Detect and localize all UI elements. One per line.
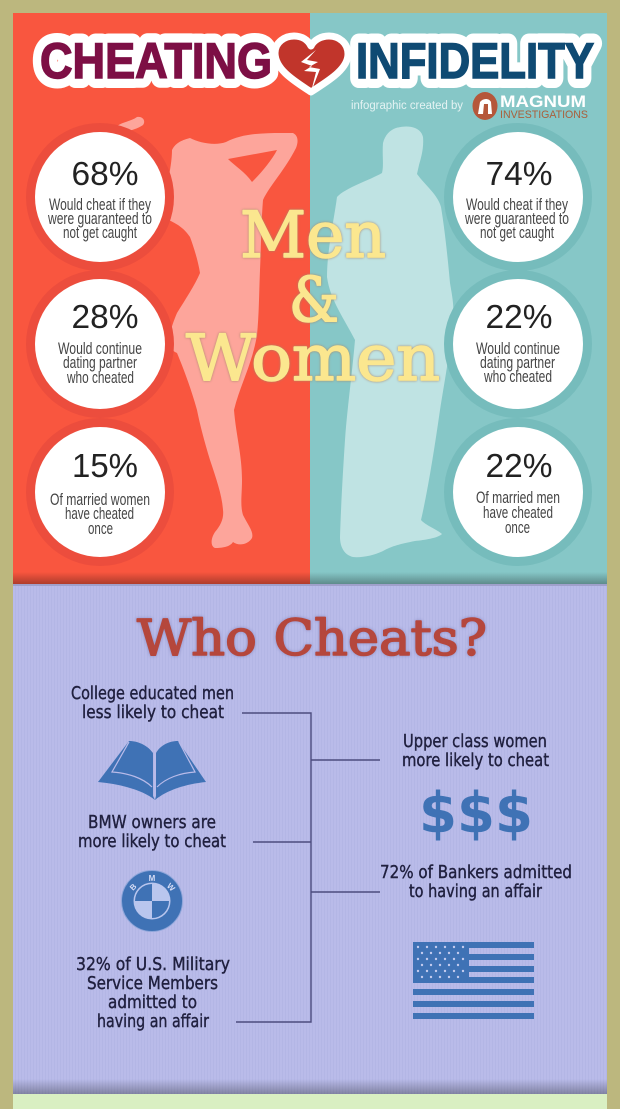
panel: women background: [13, 13, 310, 584]
stat: women continue dating: who cheated: [66, 368, 134, 387]
icon: bmw logo: M: [149, 874, 156, 883]
text: military members: [76, 954, 230, 1032]
text: military members: Service Members: [87, 973, 218, 994]
panel: who cheats: [13, 586, 607, 1094]
icon: bmw logo: W: [165, 881, 177, 893]
text: bankers: 72% of Bankers admitted: [380, 862, 572, 883]
stat: married men cheated: [444, 418, 592, 566]
icon: open book: [98, 741, 206, 800]
stat: women continue dating: 28%: [72, 298, 138, 335]
stat: women would cheat if not caught: were guaranteed to: [47, 209, 152, 228]
stat: men would cheat if not caught: were guaranteed to: [464, 209, 569, 228]
connector lines: [236, 713, 380, 1022]
text: bmw owners: [78, 812, 226, 852]
stat: women continue dating: dating partner: [63, 353, 137, 372]
panel: next section strip: [13, 1094, 607, 1109]
stat: men continue dating: who cheated: [483, 367, 552, 386]
stat: men continue dating: [444, 270, 592, 418]
title: Cheating: CHEATING: [40, 33, 272, 89]
text: bankers: [380, 862, 572, 902]
panel: men background: [310, 13, 607, 584]
stat: women would cheat if not caught: 68%: [72, 155, 138, 192]
title banner: [40, 33, 594, 92]
panel: lower shade: [13, 1079, 607, 1094]
stat: married men cheated: have cheated: [483, 503, 553, 522]
stat: men continue dating: dating partner: [480, 353, 555, 372]
text: college educated men: College educated men: [71, 683, 234, 704]
stat: men continue dating: Would continue: [476, 339, 560, 358]
stat: women would cheat if not caught: [26, 123, 174, 271]
icon: bmw logo: [122, 870, 182, 932]
text: college educated men: [71, 683, 234, 723]
text: magnum investigations: [500, 92, 588, 121]
icon: dollar signs: $$$: [419, 781, 533, 846]
text: upper class women: Upper class women: [403, 731, 547, 752]
text: upper class women: more likely to cheat: [402, 750, 549, 771]
text: military members: having an affair: [97, 1011, 209, 1032]
text: bmw owners: more likely to cheat: [78, 831, 226, 852]
icon: us flag: [413, 942, 534, 1019]
panel: who cheats top rim: [13, 584, 607, 586]
stat: men continue dating: 22%: [486, 298, 552, 335]
stat: married men cheated: once: [505, 518, 530, 537]
stat: women would cheat if not caught: Would cheat if they: [49, 195, 151, 214]
text: military members: 32% of U.S. Military: [76, 954, 230, 975]
stat: married women cheated: have cheated: [65, 504, 134, 523]
stat: married women cheated: [26, 418, 174, 566]
stat: married women cheated: once: [88, 519, 113, 538]
icon: magnum fingerprint logo: [472, 92, 498, 120]
stat: men would cheat if not caught: [444, 123, 592, 271]
title: Cheating: CHEATING: [40, 33, 272, 89]
text: infographic created by: infographic created by: [351, 100, 463, 112]
text: magnum investigations: INVESTIGATIONS: [500, 109, 588, 121]
stat: women continue dating: [26, 270, 174, 418]
heading: Men and Women: Women: [186, 322, 440, 396]
text: magnum investigations: MAGNUM: [500, 92, 586, 111]
text: bmw owners: BMW owners are: [88, 812, 216, 833]
stat: women would cheat if not caught: not get caught: [63, 223, 137, 242]
heading: Men and Women: &: [289, 263, 339, 336]
icon: broken heart: [275, 36, 348, 92]
text: bankers: to having an affair: [409, 881, 542, 902]
text: military members: admitted to: [108, 992, 197, 1013]
panel: bottom shade: [13, 572, 607, 584]
icon: bmw logo: B: [128, 882, 139, 892]
text: upper class women: [402, 731, 549, 771]
stat: women continue dating: Would continue: [58, 339, 142, 358]
stat: men would cheat if not caught: 74%: [486, 155, 552, 192]
heading: Men and Women: Men: [240, 199, 386, 273]
stat: men would cheat if not caught: not get caught: [480, 223, 554, 242]
stat: married women cheated: 15%: [72, 447, 138, 484]
heading: Men and Women: [186, 199, 440, 396]
stat: men would cheat if not caught: Would cheat if they: [466, 195, 568, 214]
stat: married men cheated: Of married men: [476, 488, 560, 507]
credit line: [351, 92, 588, 121]
text: college educated men: less likely to cheat: [82, 702, 224, 723]
stat: married men cheated: 22%: [486, 447, 552, 484]
heading: who cheats: Who Cheats?: [137, 609, 487, 667]
stat: married women cheated: Of married women: [50, 490, 150, 509]
silhouette: man: [327, 126, 453, 557]
silhouette: woman: [115, 117, 298, 548]
